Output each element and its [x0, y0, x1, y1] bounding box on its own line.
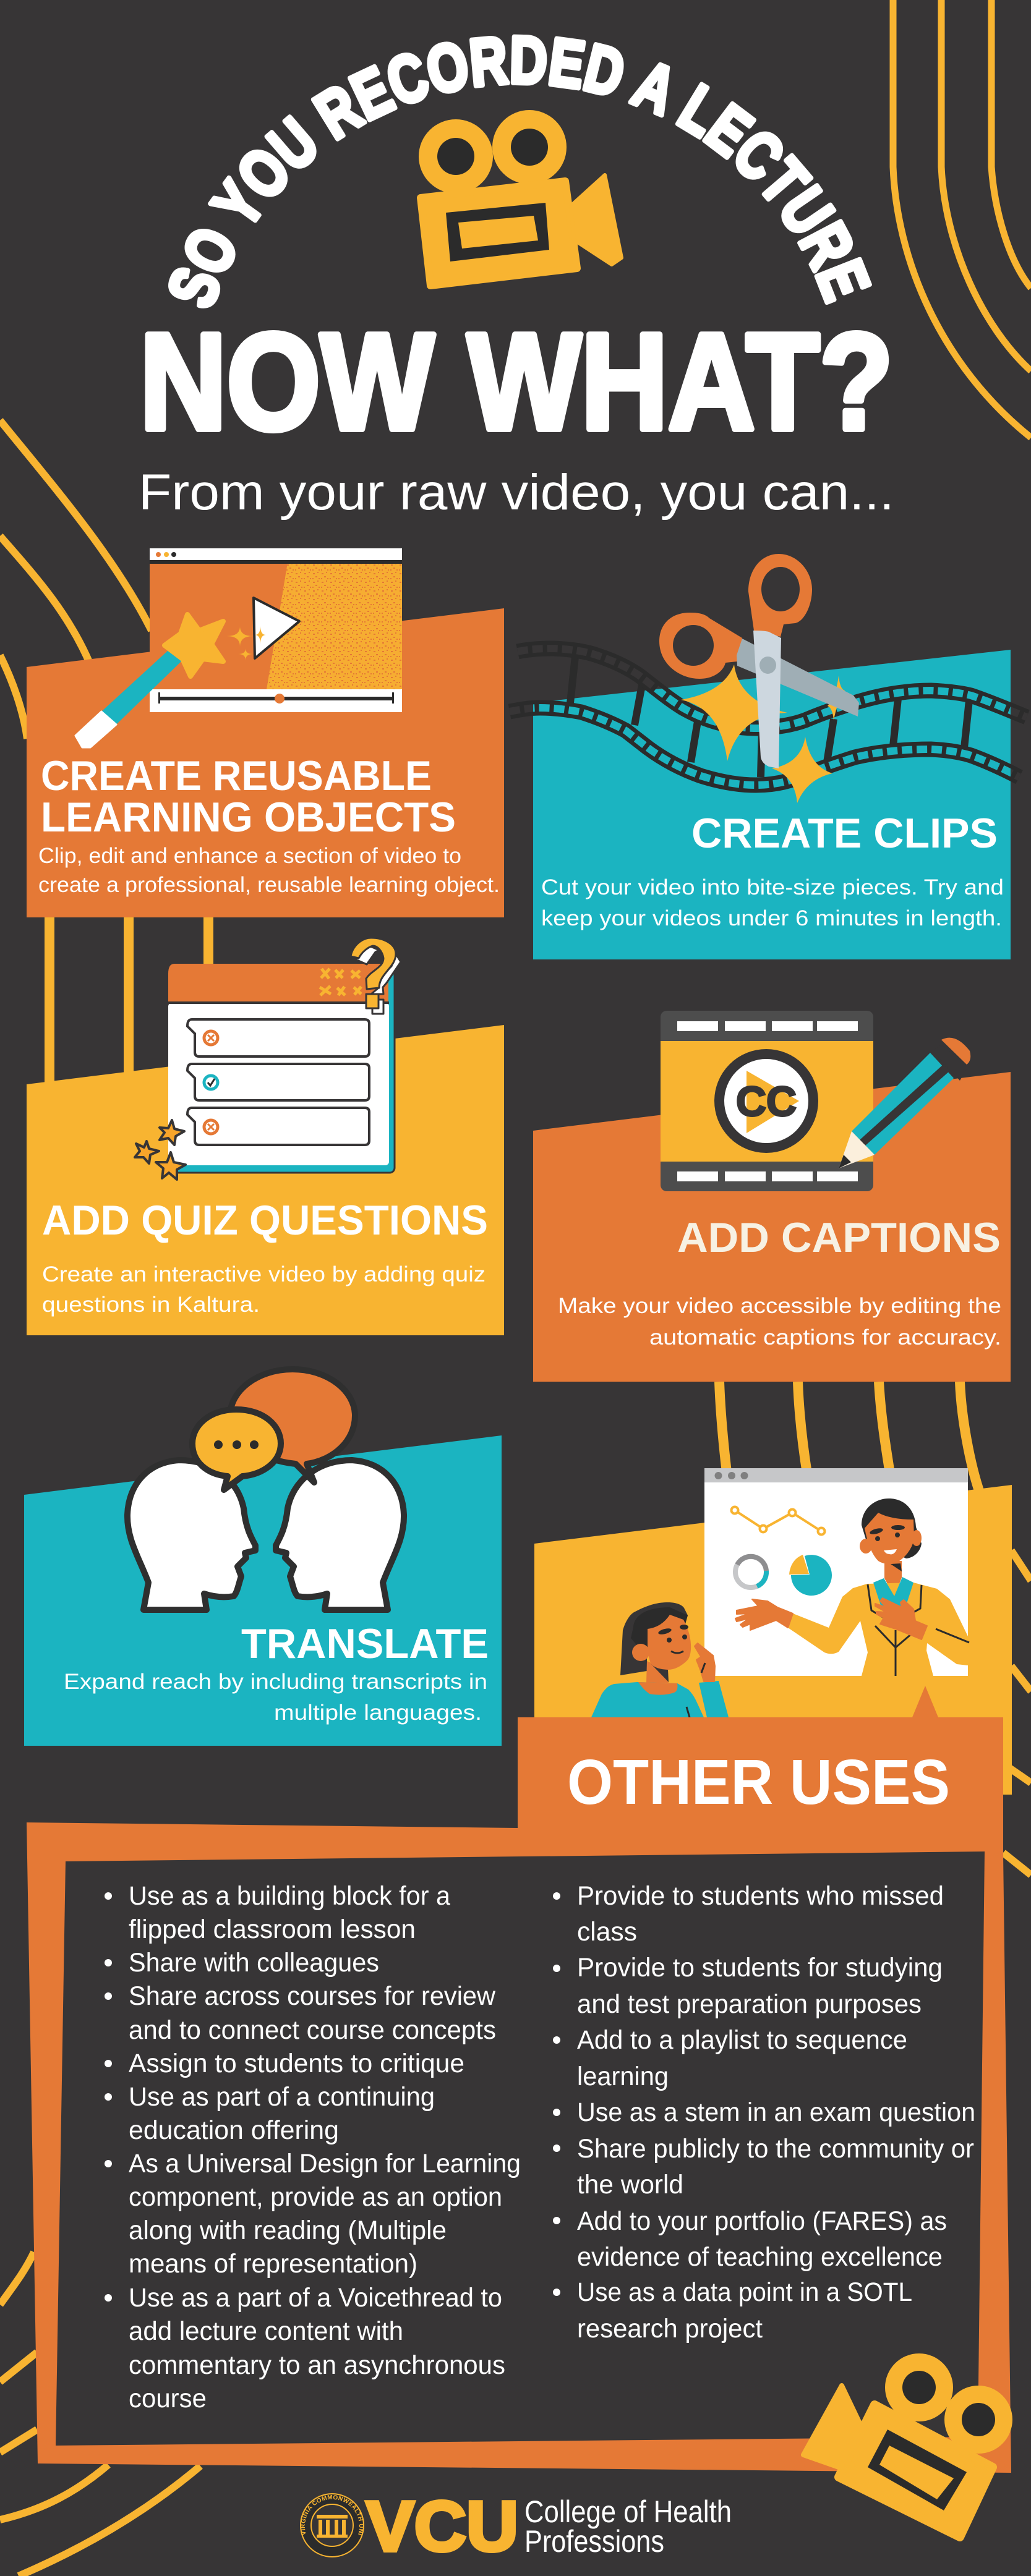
list: right column: Use as a data point in a SOTL [577, 2277, 912, 2307]
icon: corner film camera [803, 2353, 1012, 2537]
list: right column: Use as a stem in an exam question [577, 2098, 975, 2127]
list: left column: flipped classroom lesson [129, 1915, 416, 1944]
heading and body text: Make your video accessible by editing the [558, 1294, 1001, 1318]
list: left column: component, provide as an option [129, 2182, 502, 2212]
list: left column: add lecture content with [129, 2316, 403, 2346]
icon: orange speech bubble [230, 1369, 355, 1482]
icon: pencil [839, 1038, 970, 1168]
heading and body text [42, 1197, 488, 1317]
icon: film camera [419, 110, 622, 286]
heading and body text: ADD CAPTIONS [677, 1214, 1001, 1261]
heading and body text: create a professional, reusable learning object. [38, 873, 500, 897]
list: left column: Share across courses for review [129, 1981, 496, 2011]
panel: add quiz questions [27, 938, 504, 1335]
heading and body text: multiple languages. [274, 1701, 482, 1725]
list: left column: means of representation) [129, 2249, 417, 2279]
line chart [731, 1507, 825, 1534]
heading and body text: TRANSLATE [241, 1620, 489, 1667]
icon: sparkles [681, 665, 845, 803]
heading and body text [558, 1214, 1001, 1350]
icon: stars [135, 1120, 186, 1180]
list: right column: Provide to students for studying [577, 1953, 943, 1983]
logo: VCU College of Health Professions: VCU [366, 2488, 518, 2566]
list: left column: Use as a building block for a [129, 1881, 450, 1911]
heading and body text: keep your videos under 6 minutes in length. [541, 906, 1002, 930]
student figure [591, 1602, 729, 1717]
presentation board [704, 1468, 968, 1676]
list: left column: As a Universal Design for Learning [129, 2149, 521, 2179]
logo seal: VIRGINIA COMMONWEALTH UNIVERSITY [301, 2495, 363, 2535]
icon: quiz card [168, 964, 395, 1173]
panel: translate [24, 1369, 502, 1746]
headline: now what: NOW WHAT? [140, 305, 893, 459]
list: left column: education offering [129, 2115, 339, 2145]
title arc: so you recorded a lecture: SO YOU RECORDED A LECTURE [168, 35, 872, 308]
list: left column: along with reading (Multiple [129, 2216, 447, 2245]
list: left column: Assign to students to critique [129, 2049, 464, 2078]
list: right column: Add to your portfolio (FARES) as [577, 2206, 947, 2236]
icon: magic wand [75, 614, 223, 747]
heading and body text: Expand reach by including transcripts in [64, 1670, 487, 1694]
icon: x marks [320, 969, 361, 995]
list: right column: Add to a playlist to sequence [577, 2025, 907, 2055]
heading and body text [64, 1620, 489, 1725]
logo: VCU College of Health Professions: College of Health [524, 2494, 732, 2529]
list: right column: class [577, 1917, 637, 1947]
list: right column: learning [577, 2062, 669, 2091]
list: left column [105, 1881, 521, 2413]
heading and body text: CREATE CLIPS [691, 810, 998, 857]
heading and body text: CREATE REUSABLE [41, 752, 432, 799]
heading and body text: ADD QUIZ QUESTIONS [42, 1197, 488, 1244]
donut chart [735, 1557, 766, 1588]
icon: scissors [659, 554, 859, 768]
icon: yellow speech bubble [192, 1409, 281, 1490]
icon: video player window [150, 548, 402, 712]
heading and body text: LEARNING OBJECTS [41, 794, 456, 841]
icon: film strip [510, 648, 1027, 785]
panel: presenter illustration [534, 1468, 1012, 1795]
list: right column [553, 1881, 975, 2344]
logo: VCU College of Health Professions: Professions [524, 2524, 664, 2559]
list: left column: Use as a part of a Voicethread to [129, 2283, 502, 2313]
list: left column: course [129, 2384, 207, 2413]
list: left column: commentary to an asynchronous [129, 2350, 505, 2380]
heading and body text [541, 810, 1004, 930]
icon: captioned film frame: CC [736, 1078, 797, 1125]
list: right column: Provide to students who missed [577, 1881, 944, 1911]
presenter figure [735, 1498, 969, 1676]
panel: add captions [533, 1011, 1011, 1382]
list: right column: research project [577, 2314, 763, 2344]
heading and body text: automatic captions for accuracy. [649, 1325, 1001, 1350]
heading and body text: questions in Kaltura. [42, 1293, 260, 1317]
heading: other uses: OTHER USES [567, 1746, 950, 1817]
heading and body text: Clip, edit and enhance a section of video to [38, 844, 461, 868]
logo: VCU College of Health Professions [300, 2488, 732, 2566]
heading and body text: Create an interactive video by adding quiz [42, 1262, 486, 1286]
list: left column: Use as part of a continuing [129, 2082, 435, 2112]
panel: create clips [510, 554, 1027, 959]
list: left column: and to connect course concepts [129, 2015, 496, 2045]
pie chart [789, 1555, 832, 1596]
logo seal [300, 2493, 364, 2557]
list: right column: and test preparation purposes [577, 1989, 922, 2019]
subheading: From your raw video, you can... [139, 464, 894, 521]
heading and body text [38, 752, 500, 897]
list: left column: Share with colleagues [129, 1948, 379, 1978]
panel: other uses frame [27, 1717, 1011, 2473]
heading and body text: Cut your video into bite-size pieces. Try and [541, 875, 1004, 899]
icon: captioned film frame [661, 1011, 873, 1191]
list: right column: evidence of teaching excellence [577, 2242, 943, 2272]
icon: question mark [351, 938, 401, 1014]
icon: two heads [127, 1460, 404, 1610]
panel: create reusable learning objects [27, 548, 504, 917]
list: right column: Share publicly to the community or [577, 2134, 974, 2164]
list: right column: the world [577, 2170, 683, 2200]
